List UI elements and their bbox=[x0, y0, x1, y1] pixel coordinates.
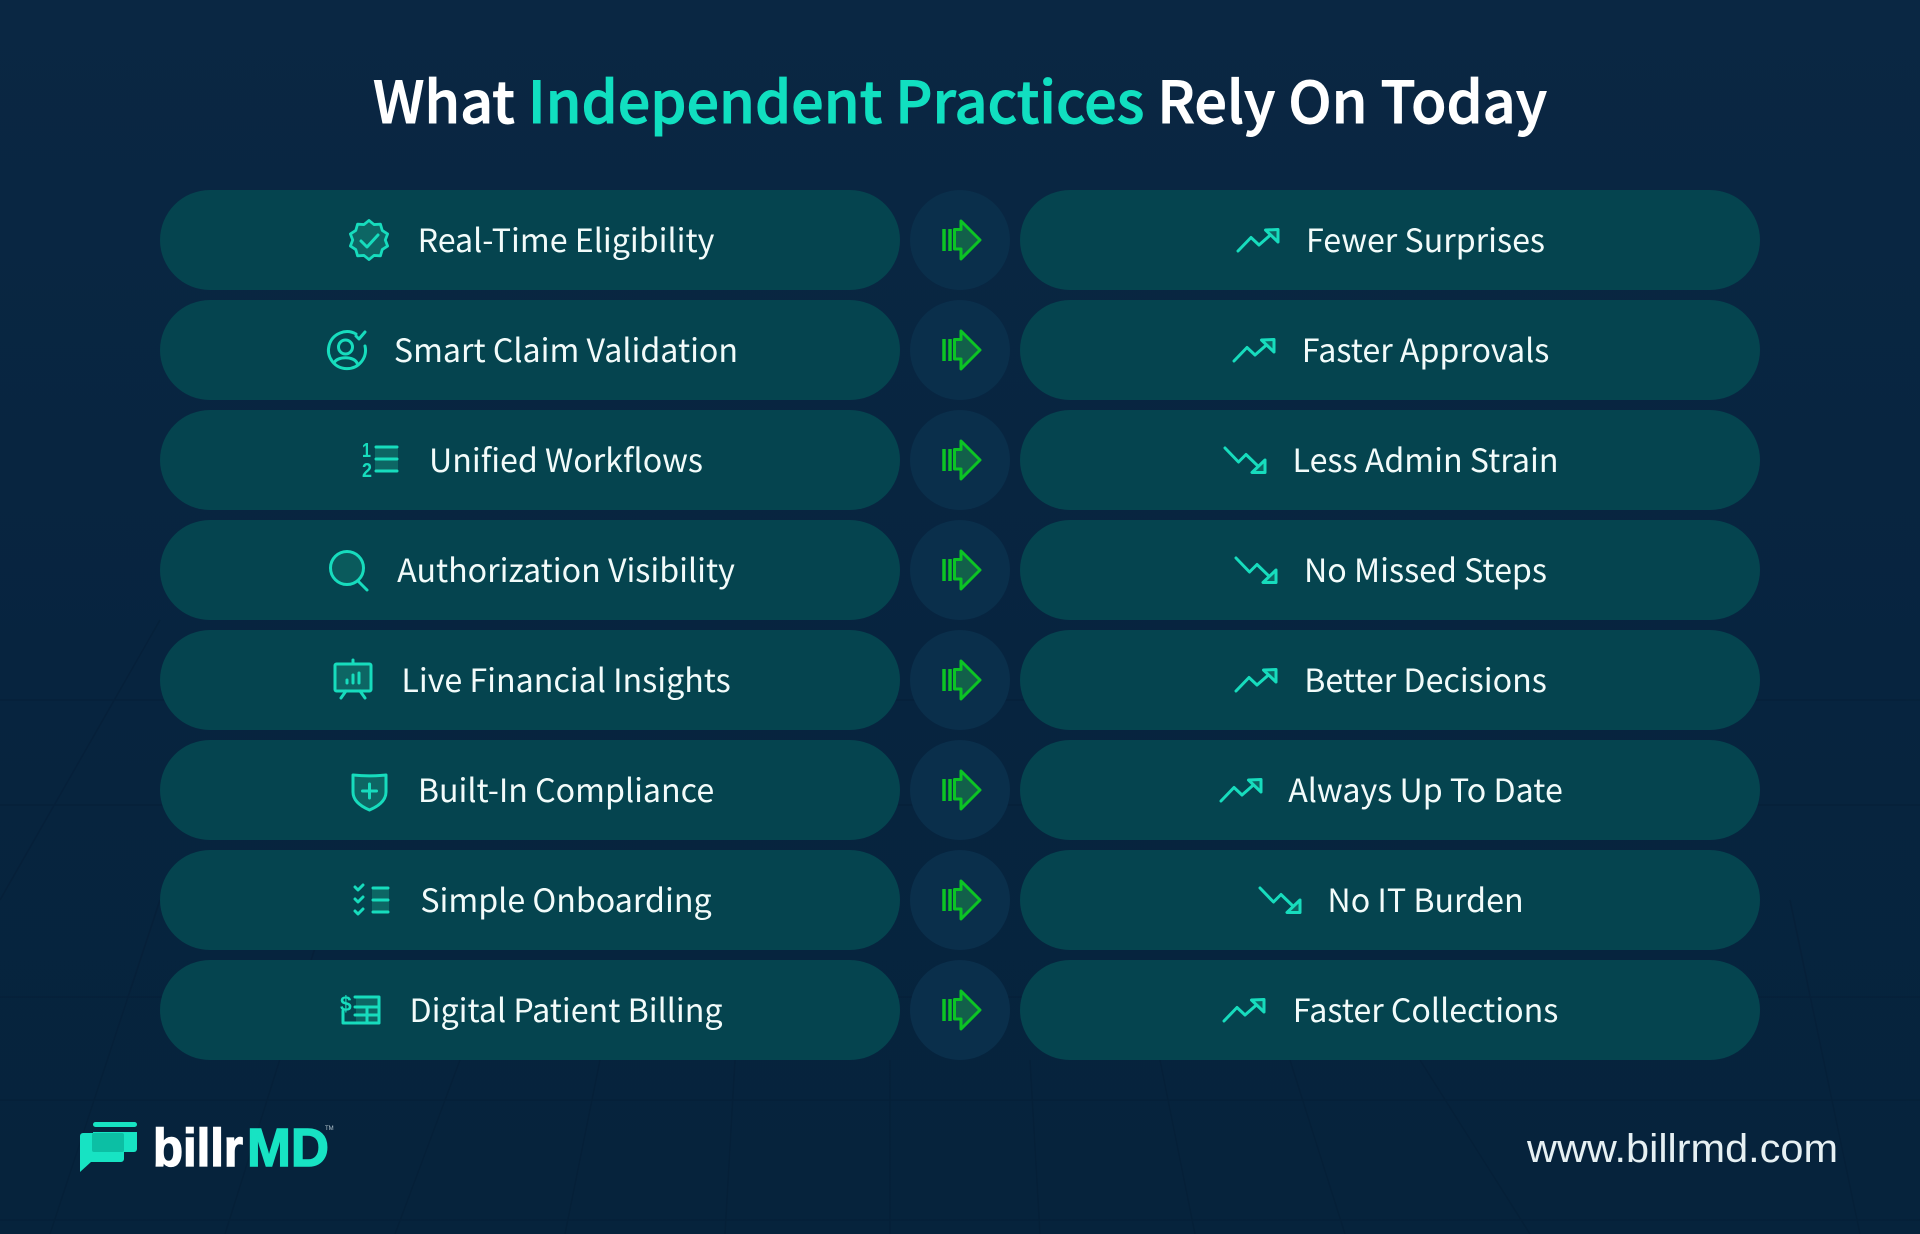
icon: verified badge bbox=[350, 220, 388, 260]
left pill: Real-Time Eligibility bbox=[160, 190, 900, 290]
label: Always Up To Date bbox=[1288, 766, 1563, 812]
right pill: Fewer Surprises bbox=[1020, 190, 1760, 290]
right pill: Better Decisions bbox=[1020, 630, 1760, 730]
row 8 bbox=[160, 960, 1760, 1060]
row 1 bbox=[160, 190, 1760, 290]
left pill: Smart Claim Validation bbox=[160, 300, 900, 400]
label: Faster Collections bbox=[1293, 986, 1558, 1032]
icon: user check bbox=[328, 332, 365, 369]
icon: numbered list: 2 bbox=[362, 460, 372, 482]
row 4 bbox=[160, 520, 1760, 620]
icon: trend down bbox=[1236, 558, 1276, 582]
arrow circle bbox=[910, 410, 1010, 510]
label: Smart Claim Validation bbox=[394, 326, 738, 372]
title: What Independent Practices Rely On Today bbox=[373, 56, 1547, 140]
icon: chat bubbles bbox=[80, 1122, 137, 1172]
icon: trend down bbox=[1260, 888, 1300, 912]
label: Unified Workflows bbox=[429, 436, 703, 482]
icon: trend up bbox=[1238, 230, 1278, 251]
icon: billing table: $ bbox=[340, 993, 352, 1016]
icon: numbered list: 1 bbox=[362, 440, 371, 462]
right pill: Always Up To Date bbox=[1020, 740, 1760, 840]
wordmark: billr bbox=[153, 1119, 243, 1178]
label: Better Decisions bbox=[1304, 656, 1547, 702]
label: Digital Patient Billing bbox=[409, 986, 723, 1032]
arrow circle bbox=[910, 520, 1010, 620]
logo: billrMD: MD bbox=[247, 1118, 329, 1178]
icon: numbered list bbox=[362, 440, 398, 482]
icon: billing table bbox=[340, 993, 379, 1023]
right pill: Faster Collections bbox=[1020, 960, 1760, 1060]
arrow circle bbox=[910, 960, 1010, 1060]
row 2 bbox=[160, 300, 1760, 400]
arrow circle bbox=[910, 630, 1010, 730]
left pill: Authorization Visibility bbox=[160, 520, 900, 620]
right pill: Faster Approvals bbox=[1020, 300, 1760, 400]
label: No Missed Steps bbox=[1304, 546, 1547, 592]
label: Faster Approvals bbox=[1302, 326, 1549, 372]
arrow circle bbox=[910, 740, 1010, 840]
icon: trend down bbox=[1225, 448, 1265, 472]
row 3 bbox=[160, 410, 1760, 510]
logo: billrMD bbox=[80, 1118, 334, 1178]
icon: trend up bbox=[1224, 1000, 1264, 1021]
right pill: Less Admin Strain bbox=[1020, 410, 1760, 510]
icon: trend up bbox=[1236, 670, 1276, 691]
arrow circle bbox=[910, 190, 1010, 290]
arrow circle bbox=[910, 300, 1010, 400]
icon: search bbox=[330, 552, 367, 590]
right pill: No IT Burden bbox=[1020, 850, 1760, 950]
icon: trend up bbox=[1234, 340, 1274, 361]
arrow circle bbox=[910, 850, 1010, 950]
row 5 bbox=[160, 630, 1760, 730]
logo: billrMD: TM bbox=[325, 1126, 334, 1132]
label: Built-In Compliance bbox=[418, 766, 714, 812]
label: Fewer Surprises bbox=[1306, 216, 1545, 262]
left pill: Unified Workflows bbox=[160, 410, 900, 510]
right pill: No Missed Steps bbox=[1020, 520, 1760, 620]
label: Live Financial Insights bbox=[401, 656, 731, 702]
label: No IT Burden bbox=[1327, 876, 1524, 922]
left pill: Live Financial Insights bbox=[160, 630, 900, 730]
icon: checklist bbox=[355, 885, 389, 914]
icon: trend up bbox=[1221, 780, 1261, 801]
icon: shield plus bbox=[353, 775, 386, 810]
label: Simple Onboarding bbox=[420, 876, 712, 922]
icon: presentation board bbox=[335, 660, 371, 698]
row 7 bbox=[160, 850, 1760, 950]
label: Real-Time Eligibility bbox=[418, 216, 715, 262]
label: Less Admin Strain bbox=[1293, 436, 1558, 482]
website url: www.billrmd.com bbox=[1526, 1127, 1838, 1171]
left pill: Digital Patient Billing bbox=[160, 960, 900, 1060]
row 6 bbox=[160, 740, 1760, 840]
label: Authorization Visibility bbox=[397, 546, 735, 592]
left pill: Simple Onboarding bbox=[160, 850, 900, 950]
left pill: Built-In Compliance bbox=[160, 740, 900, 840]
